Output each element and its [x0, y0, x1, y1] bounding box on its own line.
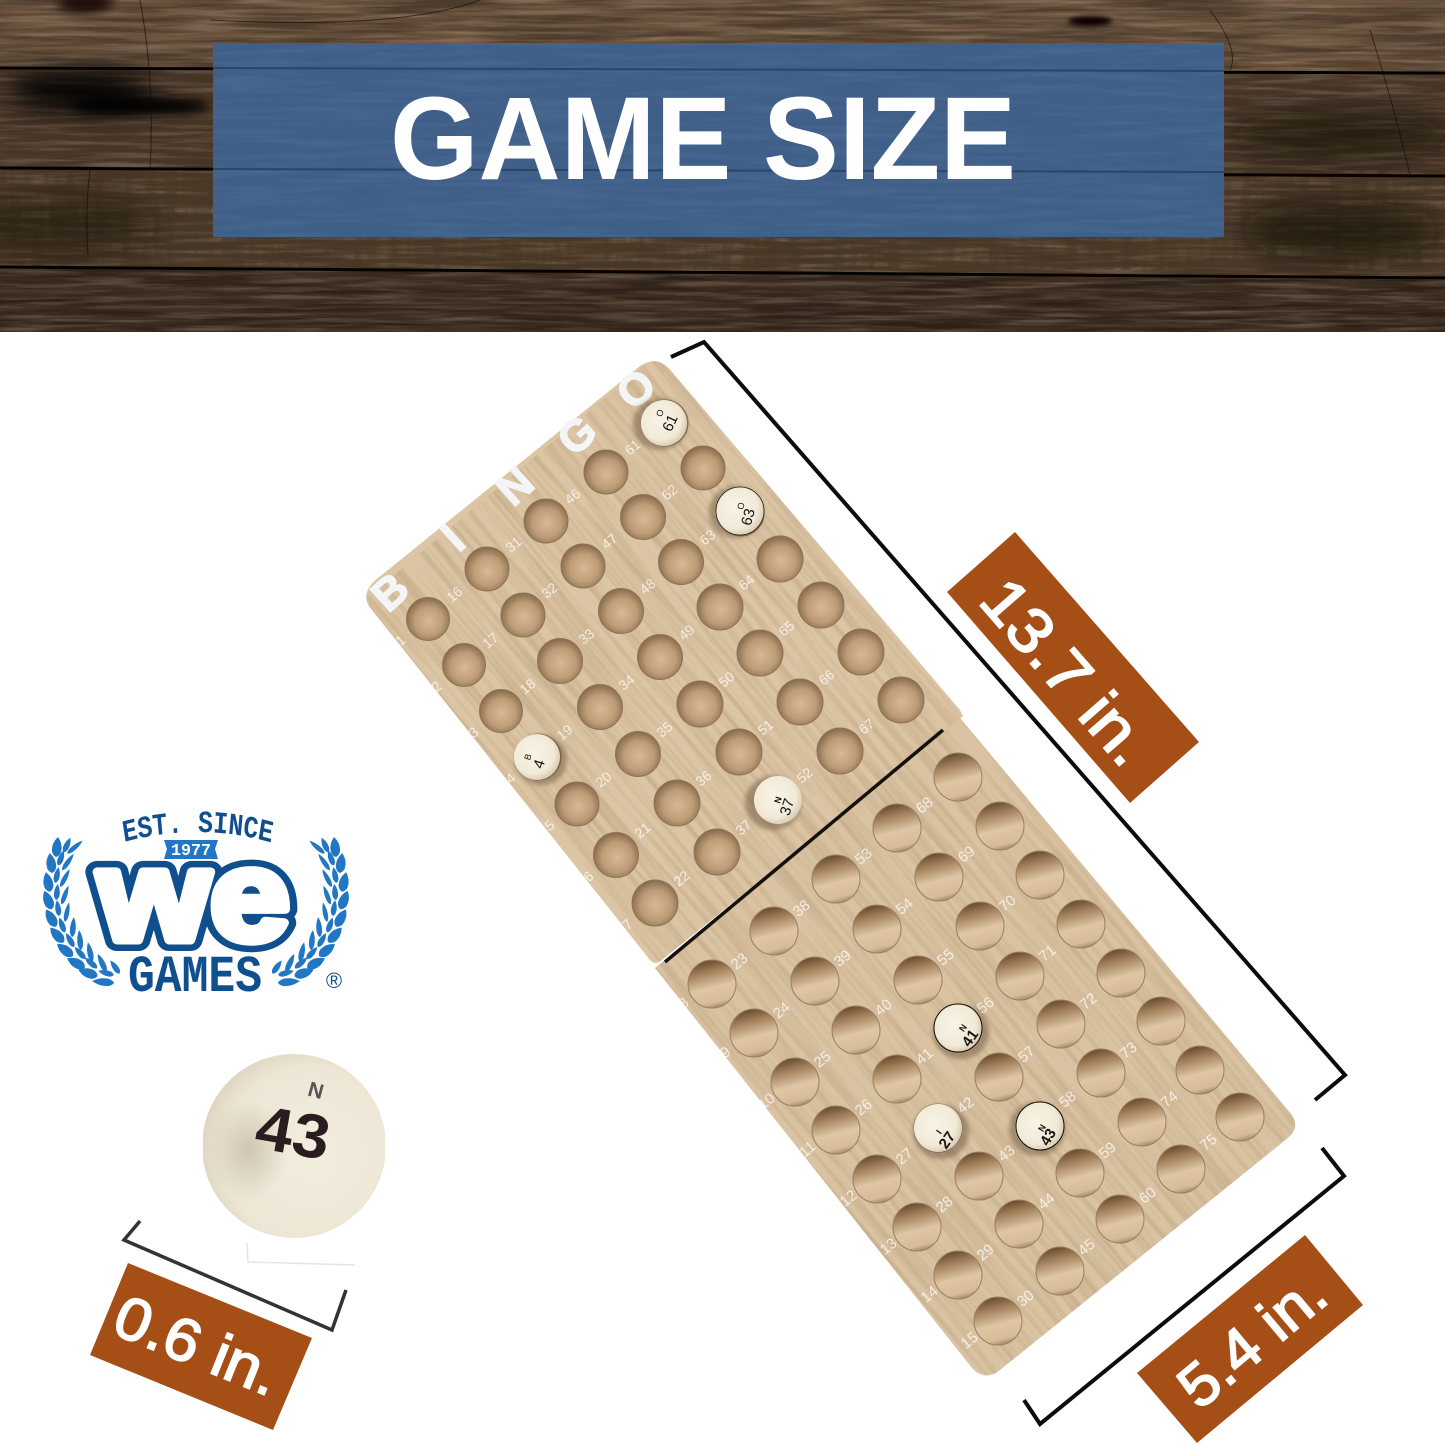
single bingo ball photo: 43: [250, 1093, 335, 1174]
ball O 63: [709, 486, 764, 538]
number labels: top panel: 47: [598, 530, 621, 552]
header: wood plank background: [0, 0, 1445, 332]
number labels: top panel: 7: [619, 915, 636, 933]
logo: WE Games: [43, 811, 349, 1007]
number labels: top panel: 36: [692, 767, 715, 789]
ball N 43: N: [1036, 1123, 1048, 1133]
registered mark: ®: [326, 968, 342, 993]
number labels: bottom panel: 58: [1056, 1088, 1080, 1111]
ribbon 1977: [164, 840, 218, 861]
number labels: top panel: 62: [658, 481, 681, 503]
number labels: top panel: 17: [479, 629, 502, 651]
number labels: top panel: 34: [615, 671, 638, 693]
number labels: bottom panel: 24: [770, 999, 794, 1022]
ball O 63: O: [735, 501, 747, 511]
ball N 37: 37: [777, 797, 798, 818]
holes: top panel: [406, 400, 924, 926]
single bingo ball photo: [202, 1054, 386, 1265]
number labels: bottom panel: 11: [796, 1138, 819, 1161]
number labels: bottom panel: 40: [872, 996, 896, 1019]
number labels: top panel: 64: [735, 571, 758, 593]
number labels: bottom panel: 44: [1035, 1190, 1059, 1213]
number labels: bottom panel: 72: [1077, 990, 1101, 1013]
est. since: EST. SINCE: [122, 811, 274, 842]
number labels: bottom panel: 42: [954, 1094, 978, 1117]
dimension bracket: 0.6 in: [124, 1221, 346, 1330]
number labels: top panel: 46: [561, 485, 584, 507]
number labels: top panel: [392, 436, 878, 933]
number labels: bottom panel: 9: [717, 1043, 734, 1062]
number labels: bottom panel: 68: [913, 794, 937, 817]
number labels: top panel: 35: [653, 718, 676, 740]
number labels: bottom panel: 26: [852, 1096, 876, 1119]
number labels: bottom panel: 10: [755, 1090, 779, 1113]
wordmark: we: [97, 824, 290, 968]
number labels: top panel: 51: [754, 716, 777, 738]
title: GAME SIZE: [390, 73, 1016, 205]
dimension label: 0.6 in.: [90, 1263, 312, 1430]
number labels: top panel: 49: [675, 621, 698, 643]
ball N 37: N: [772, 795, 784, 805]
laurel wreath left: [40, 837, 122, 987]
number labels: bottom panel: 45: [1075, 1236, 1099, 1259]
number labels: top panel: 32: [538, 579, 561, 601]
number labels: top panel: 61: [621, 436, 644, 458]
number labels: top panel: 20: [592, 768, 615, 790]
dimension label: 0.6 in.: 0.6 in.: [105, 1282, 289, 1409]
ball B 4: 4: [530, 758, 549, 771]
ball N 41: 41: [959, 1027, 982, 1050]
number labels: bottom panel: 27: [893, 1145, 917, 1168]
ball I 27: [913, 1104, 969, 1159]
number labels: bottom panel: 12: [837, 1187, 861, 1210]
number labels: bottom panel: 13: [877, 1235, 901, 1258]
number labels: top panel: 63: [696, 526, 719, 548]
number labels: top panel: 2: [428, 677, 445, 695]
ball I 27: I: [934, 1128, 944, 1136]
ball O 61: 61: [659, 412, 682, 434]
wordmark: we: [97, 824, 290, 968]
number labels: bottom panel: 69: [955, 843, 979, 866]
laurel wreath right: [270, 837, 352, 987]
dimension label: 5.4 in.: 5.4 in.: [1165, 1259, 1339, 1421]
number labels: top panel: 33: [575, 625, 598, 647]
number labels: bottom panel: 56: [974, 994, 998, 1017]
number labels: top panel: 16: [443, 583, 466, 605]
number labels: bottom panel: 54: [893, 895, 917, 918]
number labels: bottom panel: 73: [1117, 1039, 1141, 1062]
ball O 61: [633, 398, 687, 450]
number labels: top panel: 31: [502, 533, 525, 555]
number labels: bottom panel: 29: [974, 1241, 998, 1264]
number labels: bottom panel: 43: [995, 1142, 1019, 1165]
number labels: bottom panel: 38: [790, 897, 814, 920]
number labels: top panel: 5: [541, 816, 558, 834]
number labels: top panel: 50: [715, 668, 738, 690]
number labels: top panel: 1: [392, 631, 409, 649]
BINGO lettering: I: [432, 516, 474, 561]
ball N 43: [1009, 1102, 1065, 1156]
ball N 41: [933, 1004, 989, 1059]
number labels: bottom panel: 55: [934, 946, 958, 969]
number labels: bottom panel: 75: [1197, 1131, 1221, 1154]
number labels: bottom panel: 74: [1158, 1088, 1182, 1111]
number labels: bottom panel: 53: [852, 845, 876, 868]
number labels: bottom panel: 25: [811, 1048, 835, 1071]
number labels: bottom panel: 59: [1096, 1139, 1120, 1162]
number labels: bottom panel: 30: [1014, 1287, 1038, 1310]
number labels: top panel: 37: [732, 816, 755, 838]
dimension label: 13.7 in.: 13.7 in.: [966, 565, 1166, 779]
ball B 4: B: [522, 753, 534, 761]
number labels: top panel: 6: [580, 867, 597, 885]
dimension label: 13.7 in.: [947, 532, 1199, 803]
number labels: bottom panel: 70: [996, 892, 1020, 915]
number labels: top panel: 18: [516, 675, 539, 697]
BINGO lettering: G: [548, 406, 606, 465]
number labels: top panel: 19: [553, 721, 576, 743]
number labels: bottom panel: 71: [1036, 942, 1060, 965]
dimension bracket: 13.7 in: [671, 342, 1345, 1100]
number labels: top panel: 66: [815, 666, 838, 688]
BINGO lettering: N: [487, 458, 544, 515]
number labels: top panel: 65: [775, 617, 798, 639]
number labels: bottom panel: 8: [675, 994, 692, 1013]
BINGO lettering: O: [607, 360, 665, 419]
title banner: [213, 43, 1224, 237]
bingo board: top panel: [359, 354, 967, 972]
ball O 63: 63: [738, 507, 759, 527]
number labels: bottom panel: 28: [933, 1193, 957, 1216]
est. since: [122, 811, 274, 842]
ball B 4: [514, 734, 567, 785]
number labels: top panel: 67: [855, 715, 878, 737]
games: GAMES: [128, 948, 262, 1007]
number labels: bottom panel: 15: [958, 1329, 982, 1352]
ribbon 1977: 1977: [171, 842, 211, 861]
BINGO lettering: B: [362, 564, 419, 621]
ball O 61: O: [654, 408, 666, 418]
bingo balls on board: [514, 398, 1065, 1159]
holes: bottom panel: [688, 753, 1264, 1345]
ball N 43: 43: [1037, 1126, 1060, 1149]
number labels: top panel: 4: [502, 769, 519, 787]
dimension bracket: 5.4 in: [1024, 1148, 1344, 1424]
number labels: top panel: 22: [670, 867, 693, 889]
dimension label: 5.4 in.: [1137, 1235, 1363, 1443]
number labels: bottom panel: 57: [1015, 1043, 1039, 1066]
single bingo ball photo: N: [306, 1076, 326, 1103]
number labels: bottom panel: [675, 794, 1221, 1352]
number labels: top panel: 52: [793, 764, 816, 786]
number labels: bottom panel: 39: [831, 947, 855, 970]
number labels: top panel: 21: [631, 819, 654, 841]
number labels: bottom panel: 41: [913, 1045, 937, 1068]
number labels: top panel: 48: [636, 575, 659, 597]
seam between board panels: [665, 730, 943, 962]
number labels: bottom panel: 60: [1136, 1184, 1160, 1207]
BINGO lettering: [362, 360, 665, 621]
ball I 27: 27: [936, 1129, 959, 1152]
ball N 37: [745, 776, 802, 830]
ball N 41: N: [957, 1022, 969, 1034]
number labels: top panel: 3: [465, 723, 482, 741]
bingo board: bottom panel: [644, 707, 1306, 1385]
number labels: bottom panel: 23: [728, 950, 752, 973]
number labels: bottom panel: 14: [918, 1283, 942, 1306]
